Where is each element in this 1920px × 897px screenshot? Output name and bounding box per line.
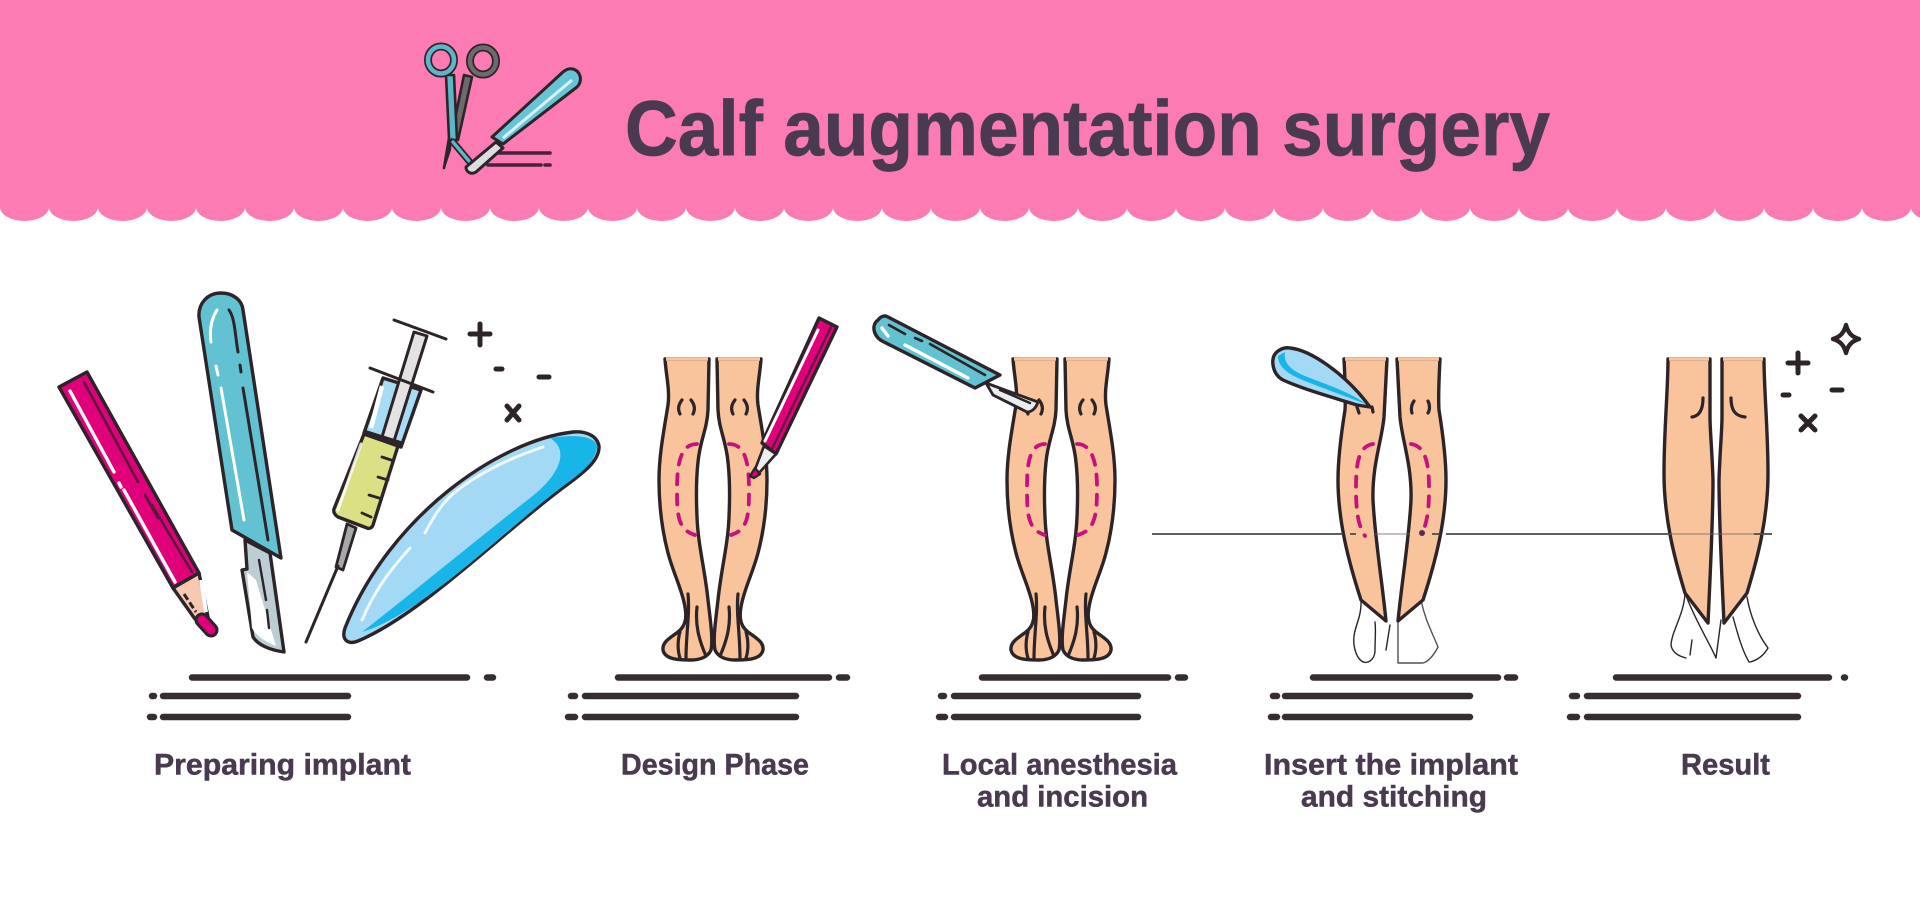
dashed calf markings [1356, 444, 1429, 536]
label: Design Phase [621, 748, 809, 782]
text placeholder lines [150, 678, 493, 717]
icon: scissors and scalpel [428, 46, 580, 173]
icon: marker pen [750, 318, 837, 478]
legs [1338, 359, 1446, 621]
feet outline [1354, 600, 1438, 663]
feet outline [1671, 593, 1768, 662]
panel: preparing implant [59, 293, 599, 782]
icon: scalpel [199, 293, 284, 652]
panel: insert the implant and stitching [1264, 348, 1518, 814]
label: Result [1681, 748, 1770, 782]
header banner [0, 0, 1920, 221]
icon: syringe [306, 320, 446, 642]
legs [1007, 359, 1115, 660]
dashed calf markings [677, 444, 749, 535]
label [942, 748, 1177, 814]
panel: local anesthesia and incision [874, 316, 1185, 814]
legs [659, 359, 767, 660]
panel: result [1570, 325, 1859, 782]
label: and incision [977, 780, 1148, 814]
text placeholder lines [1271, 678, 1515, 717]
label: and stitching [1301, 780, 1487, 814]
icon: marker pen [59, 372, 211, 630]
horizontal guide line [1152, 530, 1772, 536]
title: Calf augmentation surgery [625, 84, 1550, 172]
label: Preparing implant [154, 748, 411, 782]
label [1264, 748, 1518, 814]
text placeholder lines [1570, 678, 1845, 717]
knee marks [1692, 398, 1745, 417]
legs [1664, 359, 1768, 623]
scissors [428, 46, 496, 168]
icon: plus and minus sparkles [470, 324, 549, 420]
icon: silicone implant [1273, 348, 1370, 407]
icon: silicone implant [344, 432, 599, 642]
panel: design phase [568, 318, 847, 782]
dashed calf markings [1027, 444, 1097, 535]
text placeholder lines [939, 678, 1185, 717]
knee marks [1357, 401, 1430, 413]
text placeholder lines [568, 678, 847, 717]
icon: sparkle star and marks [1783, 325, 1859, 430]
icon: scalpel [874, 316, 1038, 412]
label: Local anesthesia [942, 748, 1177, 782]
small scalpel [466, 69, 580, 173]
label: Insert the implant [1264, 748, 1518, 782]
